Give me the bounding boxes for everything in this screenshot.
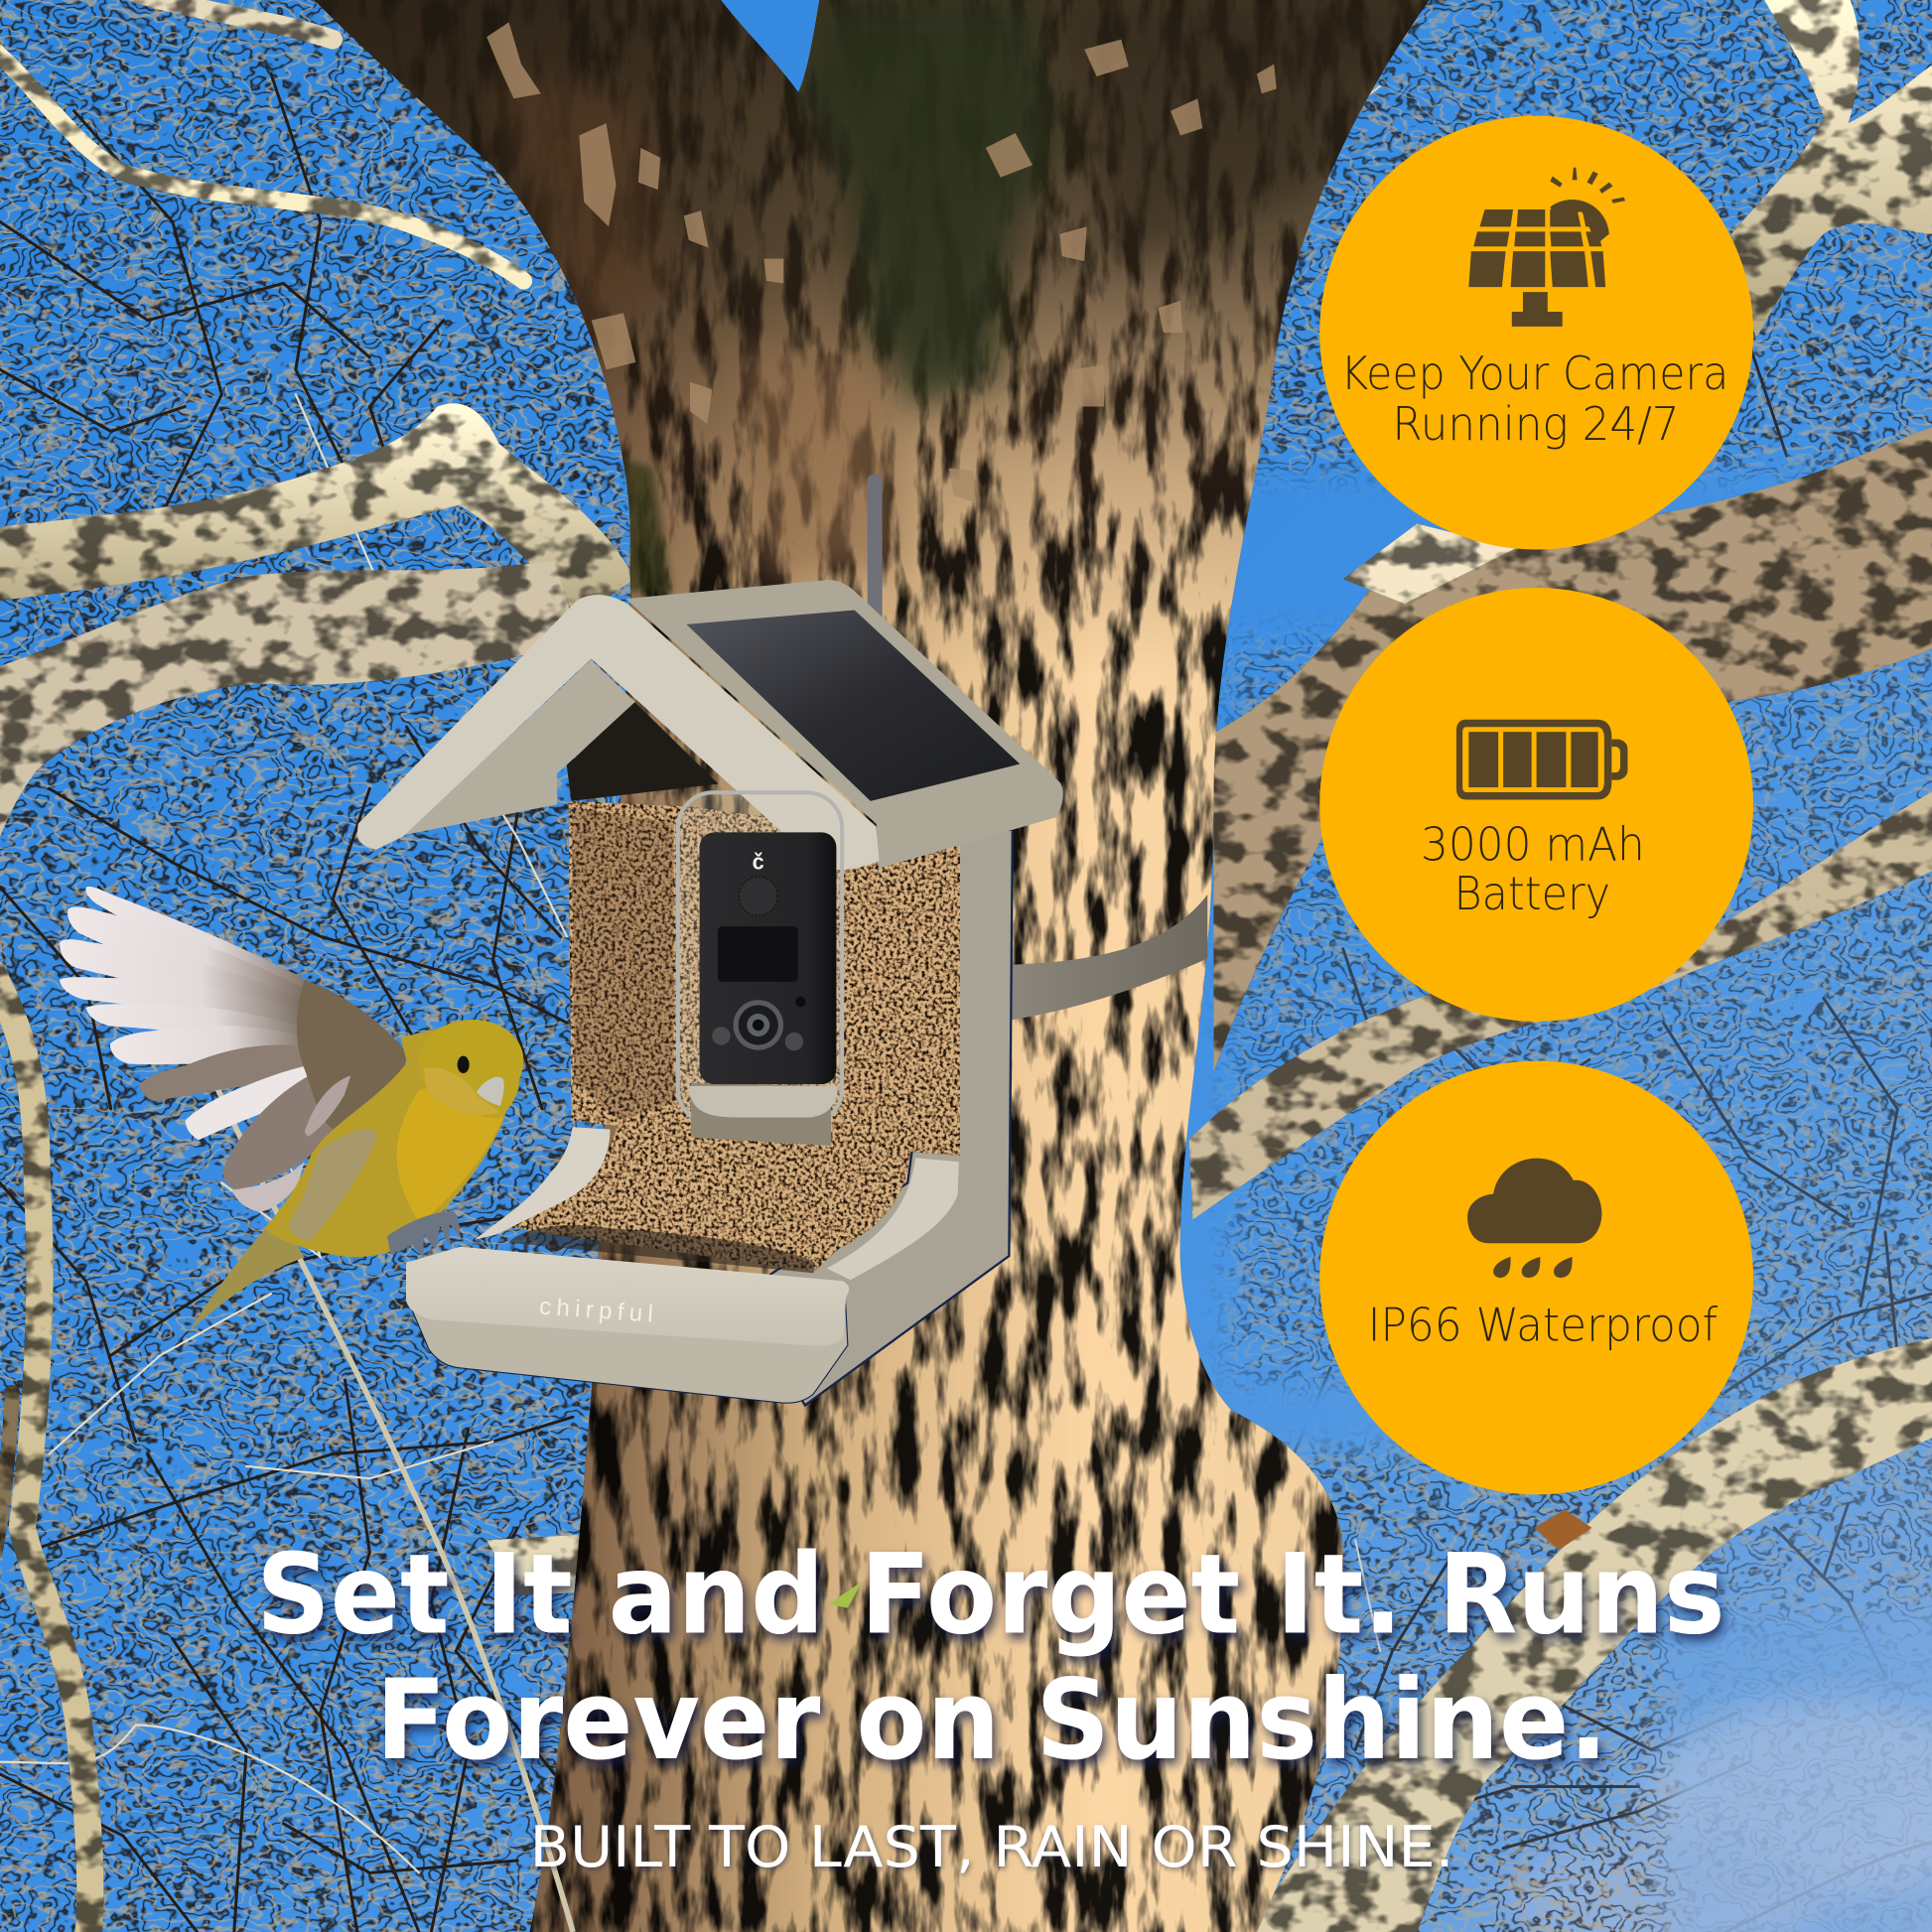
camera clear holder <box>678 792 842 1124</box>
small green leaf on the trunk <box>828 1581 863 1608</box>
badge: battery: Battery <box>1453 867 1610 920</box>
icon: solar panel with sun <box>1468 168 1625 327</box>
branch: top edge limb <box>136 0 333 40</box>
badge text: IP66 Waterproof <box>1368 1298 1718 1351</box>
tail <box>189 1214 305 1332</box>
left curved tray arm <box>475 1127 610 1240</box>
branch: stub left of trunk <box>486 1534 592 1595</box>
head <box>419 1020 523 1119</box>
hopper side dark shading <box>571 807 674 1120</box>
beak <box>477 1077 504 1106</box>
bark flakes on the upper trunk <box>486 22 1277 502</box>
cheek <box>424 1067 499 1115</box>
wing covert shoulder <box>297 980 407 1132</box>
speaker grille <box>739 877 777 915</box>
photo background: pale haze clouds, lower right <box>1503 1701 1932 1932</box>
branch: left elbow limb <box>0 403 634 617</box>
tray front lip <box>406 1247 849 1346</box>
front gable roof band <box>357 595 879 870</box>
roof underside <box>403 659 635 835</box>
product: smart bird feeder <box>357 580 1063 1405</box>
right roof face <box>625 580 1063 869</box>
camera lens <box>733 1000 783 1050</box>
pale wing patches <box>305 1075 350 1137</box>
wing feathers <box>60 887 350 1212</box>
branch: left vertical limb <box>0 973 90 1932</box>
dark roof cavity <box>567 701 719 801</box>
trunk upper shading and moss <box>315 0 1430 645</box>
pale belly and flank <box>289 1129 377 1241</box>
branch: far left secondary <box>0 1392 12 1553</box>
holder lower plate <box>691 1083 831 1146</box>
camera logo mark: č <box>753 850 764 875</box>
feeder back wall <box>737 830 1013 1405</box>
badge: battery <box>1319 588 1753 1022</box>
branch: bottom right limb <box>1251 1337 1932 1932</box>
branch: upper left limb <box>0 50 523 281</box>
dry leaf on the bottom right branch <box>1534 1509 1591 1550</box>
foreground pale stick crossing the trunk edge <box>215 1084 573 1932</box>
branch: right main limb <box>1213 425 1932 1072</box>
trunk body with bark <box>314 0 1430 1932</box>
IR lights <box>712 1027 803 1050</box>
tray lower body <box>409 1269 848 1403</box>
strap around the tree <box>1011 895 1207 1021</box>
headline <box>256 1530 1725 1785</box>
feature badges <box>1319 116 1753 1494</box>
branch: left lower limb <box>0 561 579 850</box>
antenna <box>868 475 883 622</box>
icon: rain cloud <box>1467 1159 1601 1278</box>
tree: thin left branches <box>0 0 523 1932</box>
badge circle <box>1319 1061 1753 1494</box>
light sensor <box>795 997 805 1007</box>
tree: trunk <box>296 0 1453 1932</box>
branch: right lower limb <box>1189 788 1932 1220</box>
headline: Set It and Forget It. Runs <box>256 1530 1725 1659</box>
camera module <box>700 832 836 1084</box>
headline: Forever on Sunshine. <box>376 1656 1608 1785</box>
branch: right small fork <box>1343 523 1516 604</box>
bright chest <box>397 1089 503 1224</box>
seed tray shadow <box>508 1225 815 1273</box>
eye <box>458 1056 470 1073</box>
goldfinch bird in flight <box>60 887 523 1332</box>
right curved tray arm <box>827 1158 959 1280</box>
badge circle <box>1319 588 1753 1022</box>
camera body <box>700 832 836 1084</box>
feet gripping tray <box>387 1211 460 1258</box>
subheading: BUILT TO LAST, RAIN OR SHINE. <box>530 1815 1453 1880</box>
branch: top right limb <box>1731 0 1932 339</box>
badge text: 3000 mAh <box>1421 817 1645 871</box>
sensor window <box>718 926 798 982</box>
badge text: Keep Your Camera <box>1340 346 1728 400</box>
badge circle <box>1319 116 1753 550</box>
icon: battery <box>1456 720 1627 799</box>
badge: waterproof <box>1319 1061 1753 1494</box>
body <box>265 1023 519 1257</box>
badge: solar: Running 24/7 <box>1392 397 1680 451</box>
brand wordmark: chirpful <box>538 1294 654 1328</box>
seed hopper <box>508 801 960 1272</box>
badge: solar <box>1319 116 1753 550</box>
solar panel <box>686 611 1020 801</box>
